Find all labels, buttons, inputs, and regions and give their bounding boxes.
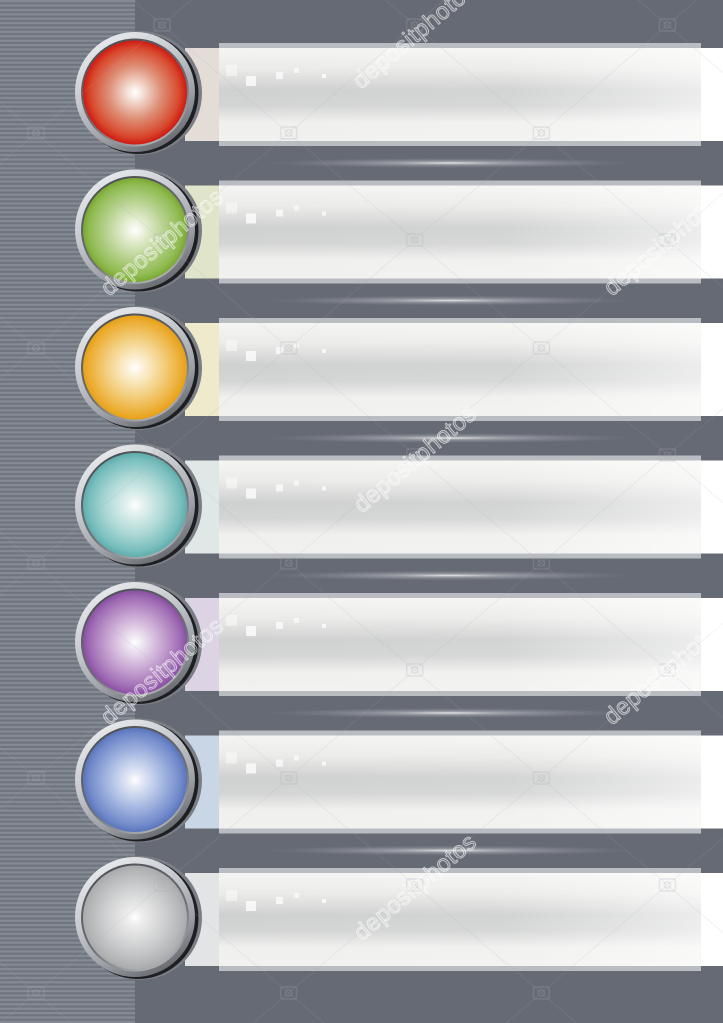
watermark text: depositphotos	[95, 183, 228, 301]
light streak 2	[265, 296, 635, 306]
button 1	[75, 31, 202, 155]
button 2	[75, 168, 202, 292]
banner row 1: red	[75, 31, 723, 155]
banner row 7: gray	[75, 856, 723, 980]
banner row 4: teal	[75, 444, 723, 568]
button 5	[75, 581, 202, 705]
watermark text: depositphotos	[95, 612, 228, 730]
watermark text: depositphotos	[348, 400, 481, 518]
light streak 3	[265, 433, 635, 443]
white banner 5	[219, 593, 723, 696]
white banner 2	[219, 180, 723, 284]
watermark text: depositphotos	[348, 828, 481, 946]
light streak 1	[265, 158, 635, 168]
button 6	[75, 718, 202, 842]
button 3	[75, 306, 202, 430]
tinted connector 5	[185, 598, 219, 691]
banner row 3: yellow	[75, 306, 723, 430]
button 4	[75, 444, 202, 568]
banner row 2: green	[75, 168, 723, 292]
white banner 4	[219, 456, 723, 558]
white banner 3	[219, 318, 723, 421]
tinted connector 7	[185, 873, 219, 966]
striped left panel	[0, 0, 135, 1023]
button 7	[75, 856, 202, 980]
tinted connector 6	[185, 736, 219, 828]
banner row 5: purple	[75, 581, 723, 705]
banner row 6: blue	[75, 718, 723, 842]
tinted connector 3	[185, 323, 219, 416]
white banner 6	[219, 730, 723, 834]
light streak 6	[265, 846, 635, 856]
tinted connector 2	[185, 186, 219, 278]
tinted connector 4	[185, 460, 219, 554]
white banner 7	[219, 868, 723, 971]
light streak 4	[265, 570, 635, 580]
white banner 1	[219, 43, 723, 146]
light streak 5	[265, 708, 635, 718]
tinted connector 1	[185, 48, 219, 141]
